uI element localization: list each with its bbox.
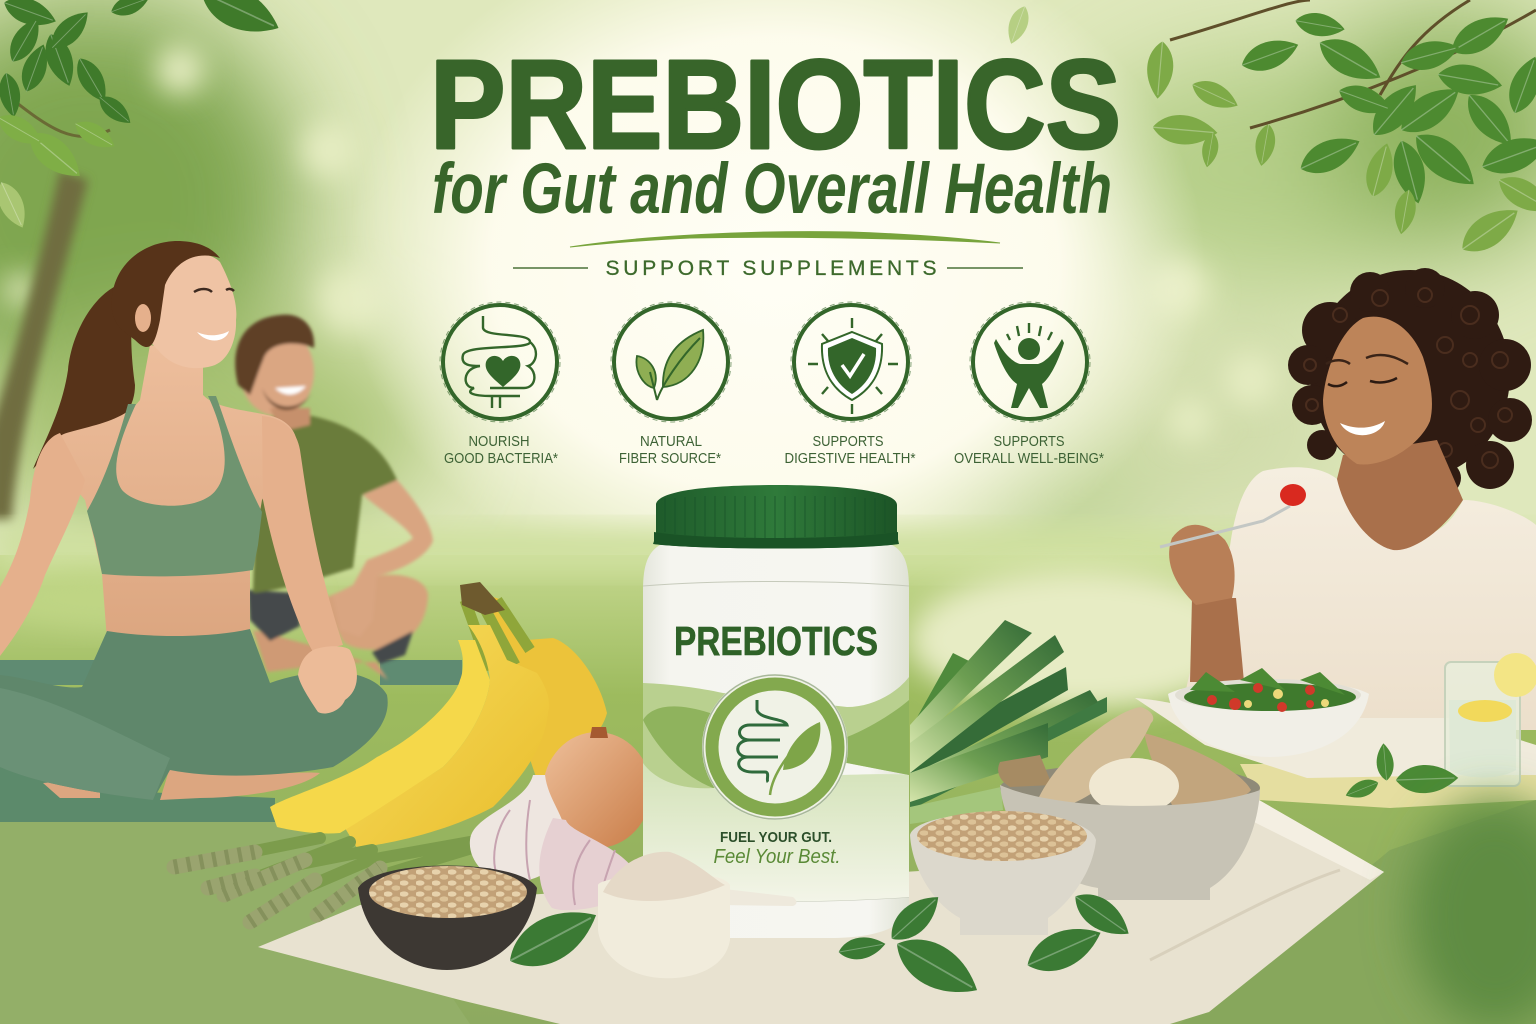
jar lower tint: [643, 763, 909, 902]
powder cup and scoop: [598, 852, 796, 978]
table: yellow cloth and linen: [1135, 698, 1536, 808]
salad bowl: [1168, 668, 1369, 757]
upper yoga mat: [0, 660, 462, 685]
benefit: nourish good bacteria: GOOD BACTERIA*: [444, 451, 558, 467]
glass of lemon water: [1445, 653, 1536, 786]
dark bowl of oats: [358, 866, 537, 970]
basil leaves on table: [1343, 743, 1459, 803]
curly hair: [1288, 268, 1532, 494]
bananas: [270, 582, 607, 848]
benefit: supports digestive health: [784, 302, 916, 467]
jar tagline: FUEL YOUR GUT.: [720, 829, 832, 846]
right arm: [262, 416, 343, 652]
man arm: [333, 480, 433, 637]
roots: [998, 755, 1052, 787]
banana right: [345, 625, 549, 848]
bowl interior: [1000, 764, 1260, 812]
hand: [298, 646, 357, 714]
sweater: [1183, 467, 1536, 730]
spinach leaves: [500, 884, 1137, 1008]
benefit: natural fiber source: [611, 302, 731, 467]
man torso: [253, 415, 397, 593]
garlic: [470, 775, 640, 910]
banana stems: [465, 596, 530, 670]
face: [1323, 317, 1432, 464]
bowl of oats right: [910, 811, 1096, 935]
hair curls: [1304, 288, 1512, 468]
icon: gut with heart: [440, 302, 560, 422]
leggings: [0, 629, 388, 800]
supplement jar: [643, 485, 909, 938]
icon: leaves: [611, 302, 731, 422]
head: [142, 253, 236, 368]
tree leaves top left: [0, 0, 287, 232]
tree leaves top right: [1003, 0, 1536, 262]
label: SUPPORTS: [812, 434, 884, 450]
banana left: [270, 640, 490, 833]
leek bundle: [910, 620, 1107, 824]
fork: [1160, 506, 1290, 547]
foreground blurred bush: [1410, 800, 1536, 1024]
bowl front: [1000, 785, 1260, 900]
label: NATURAL: [640, 434, 702, 450]
feet and shin: [43, 767, 320, 800]
man legs: [253, 630, 388, 680]
title: PREBIOTICS: [430, 34, 1121, 175]
asparagus: [174, 838, 472, 922]
icon: shield: [791, 302, 911, 422]
jar badge: gut and leaf: [702, 674, 848, 820]
crop top: [87, 396, 262, 576]
forearm and hand: [1190, 598, 1244, 682]
large bowl of chicory root: [998, 707, 1260, 900]
ground: lawn: [0, 528, 1536, 1024]
benefit: supports overall well-being: [954, 302, 1104, 467]
man shorts: [248, 590, 413, 664]
left arm: [0, 433, 85, 656]
neck: [1337, 440, 1463, 550]
jar title: PREBIOTICS: [674, 618, 878, 664]
label: SUPPORTS: [994, 434, 1064, 450]
jar label wave: [643, 677, 909, 788]
icon: raised arms figure: [970, 302, 1090, 422]
ponytail: [33, 285, 135, 469]
man head: [240, 328, 314, 416]
benefit: supports digestive health: DIGESTIVE HEALTH*: [784, 451, 916, 467]
benefit: nourish good bacteria: [440, 302, 560, 467]
person: man seated behind: [235, 315, 433, 680]
banana back: [490, 597, 607, 780]
lower yoga mat: [0, 767, 275, 822]
section heading: SUPPORT SUPPLEMENTS: [606, 257, 936, 280]
jar lid: [653, 485, 899, 548]
subtitle: for Gut and Overall Health: [432, 150, 1112, 229]
cloth: picnic blanket: [258, 800, 1384, 1024]
jar script tagline: Feel Your Best.: [714, 846, 840, 868]
person: woman in yoga pose: [0, 241, 388, 800]
banana stem tips: [460, 582, 505, 615]
person: woman eating salad: [1160, 268, 1536, 730]
tomato: [1280, 484, 1306, 506]
onion: [543, 727, 651, 848]
torso: [51, 345, 297, 640]
benefit: supports overall well-being: OVERALL WELL-BEING*: [954, 451, 1104, 467]
benefit: natural fiber source: FIBER SOURCE*: [619, 451, 721, 467]
brush underline: [570, 232, 1000, 247]
jar body: [643, 545, 909, 938]
label: NOURISH: [468, 434, 530, 450]
